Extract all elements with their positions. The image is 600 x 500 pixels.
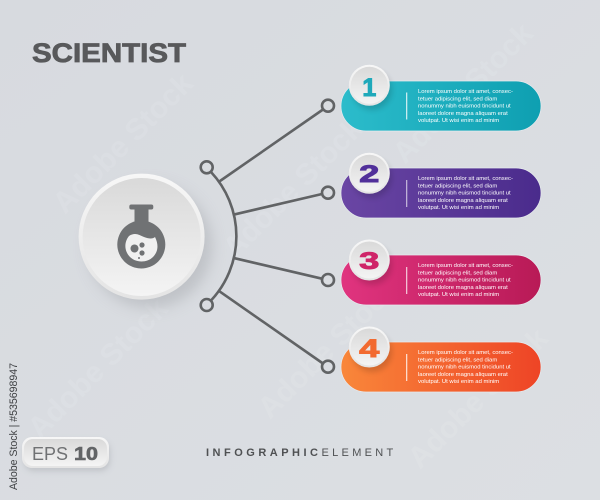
panel: step 2: tetuer adipiscing elit, sed diam: [418, 183, 497, 189]
panel: step 3: Lorem ipsum dolor sit amet, consec-: [418, 263, 513, 269]
stock id: Adobe Stock | #535698947: [8, 363, 20, 490]
panel: step 4: tetuer adipiscing elit, sed diam: [418, 357, 497, 363]
panel: step 2: volutpat. Ut wisi enim ad minim: [418, 205, 499, 211]
watermark: Adobe Stock: [387, 17, 540, 170]
panel: step 1: Lorem ipsum dolor sit amet, consec-: [418, 89, 513, 95]
panel: step 3: 3: [359, 248, 379, 275]
panel: step 1: laoreet dolore magna aliquam erat: [418, 111, 508, 117]
panel: step 3: [341, 240, 541, 305]
EPS badge: 10: [74, 444, 98, 464]
panel: step 4: Lorem ipsum dolor sit amet, consec-: [418, 350, 513, 356]
panel: step 4: 4: [359, 335, 379, 363]
panel: step 3: volutpat. Ut wisi enim ad minim: [418, 292, 499, 298]
panel: step 2: 2: [359, 161, 379, 188]
panel: step 4: nonummy nibh euismod tincidunt ut: [418, 365, 511, 371]
panel: step 2: Lorem ipsum dolor sit amet, consec-: [418, 176, 513, 182]
panel: step 3: tetuer adipiscing elit, sed diam: [418, 270, 497, 276]
panel: step 2: laoreet dolore magna aliquam erat: [418, 198, 508, 204]
title: SCIENTIST: [32, 38, 187, 68]
footer label: INFOGRAPHICELEMENT: [206, 447, 397, 459]
panel: step 4: laoreet dolore magna aliquam erat: [418, 372, 508, 378]
panel: step 1: nonummy nibh euismod tincidunt ut: [418, 104, 511, 110]
panel: step 1: 1: [362, 74, 376, 102]
watermark: Adobe Stock: [217, 112, 370, 265]
central circle with flask: [79, 174, 212, 308]
connector network: [201, 100, 334, 373]
panel: step 1: tetuer adipiscing elit, sed diam: [418, 96, 497, 102]
watermark: Adobe Stock: [402, 322, 555, 475]
panel: step 4: volutpat. Ut wisi enim ad minim: [418, 379, 499, 385]
panel: step 3: laoreet dolore magna aliquam erat: [418, 285, 508, 291]
panel: step 3: nonummy nibh euismod tincidunt ut: [418, 278, 511, 284]
panel: step 1: [341, 65, 541, 131]
panel: step 2: nonummy nibh euismod tincidunt ut: [418, 191, 511, 197]
EPS badge: [22, 437, 110, 471]
watermark: Adobe Stock: [22, 292, 175, 445]
panel: step 2: [341, 153, 541, 218]
watermark: Adobe Stock: [47, 67, 200, 220]
icon: flask: [117, 204, 165, 268]
watermark: Adobe Stock: [252, 272, 405, 425]
panel: step 1: volutpat. Ut wisi enim ad minim: [418, 118, 499, 124]
panel: step 4: [341, 326, 541, 392]
EPS badge: EPS: [32, 444, 68, 464]
